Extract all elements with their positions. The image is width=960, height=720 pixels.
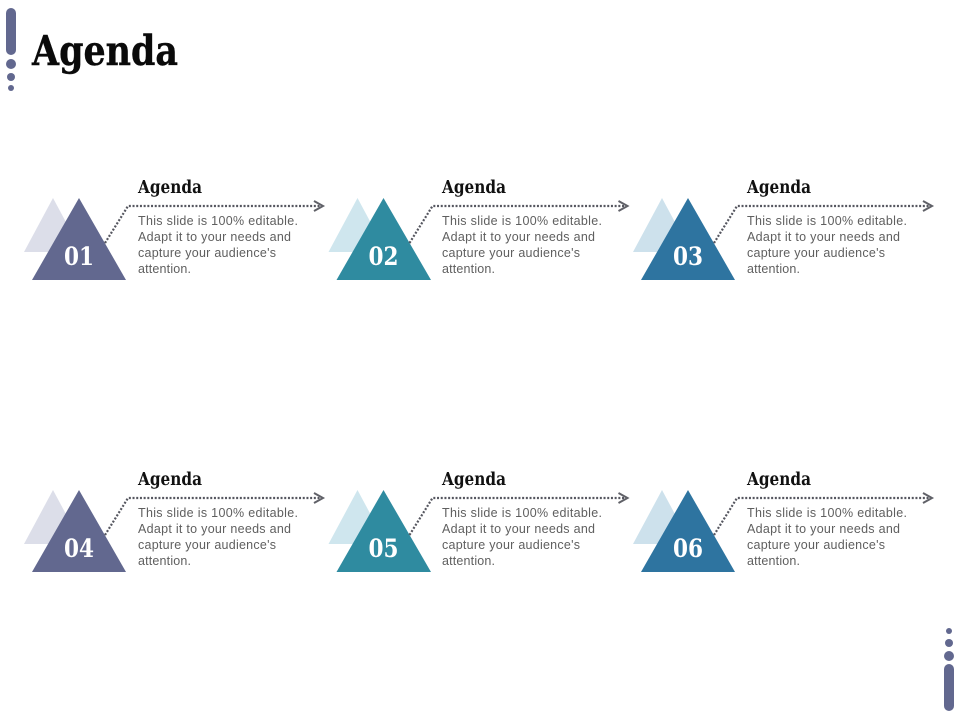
arrow 02 [410, 201, 628, 243]
title: Agenda [31, 27, 178, 75]
decoration: bottom-right pill and dots [944, 628, 954, 711]
heading 01: Agenda [137, 178, 202, 198]
icon: triangles 03 [633, 198, 735, 280]
text block 01: attention. [138, 262, 191, 276]
text block 02: This slide is 100% editable. [442, 214, 602, 228]
arrow 01 [105, 201, 323, 243]
heading 06: Agenda [746, 470, 811, 490]
text block 05: capture your audience's [442, 538, 580, 552]
text block 05: Adapt it to your needs and [442, 522, 595, 536]
number 05: 05 [368, 534, 398, 563]
text block 03: This slide is 100% editable. [747, 214, 907, 228]
text block 06: capture your audience's [747, 538, 885, 552]
text block 02: attention. [442, 262, 495, 276]
text block 04: This slide is 100% editable. [138, 506, 298, 520]
text block 03: Adapt it to your needs and [747, 230, 900, 244]
heading 03: Agenda [746, 178, 811, 198]
arrow 05 [410, 493, 628, 535]
number 06: 06 [673, 534, 703, 563]
arrow 06 [714, 493, 932, 535]
text block 04: attention. [138, 554, 191, 568]
icon: triangles 02 [328, 198, 431, 280]
text block 06: attention. [747, 554, 800, 568]
text block 01: Adapt it to your needs and [138, 230, 291, 244]
text block 06: This slide is 100% editable. [747, 506, 907, 520]
text block 05: attention. [442, 554, 495, 568]
icon: triangles 04 [24, 490, 126, 572]
icon: triangles 06 [633, 490, 735, 572]
agenda item 06 [633, 470, 932, 572]
text block 05: This slide is 100% editable. [442, 506, 602, 520]
agenda item 02 [328, 178, 628, 280]
agenda item 04 [24, 470, 323, 572]
decoration: top-left pill and dots [6, 8, 16, 91]
arrow 04 [105, 493, 323, 535]
arrow 03 [714, 201, 932, 243]
text block 04: Adapt it to your needs and [138, 522, 291, 536]
icon: triangles 01 [24, 198, 126, 280]
icon: triangles 05 [328, 490, 431, 572]
text block 04: capture your audience's [138, 538, 276, 552]
text block 03: attention. [747, 262, 800, 276]
heading 05: Agenda [441, 470, 506, 490]
number 01: 01 [64, 242, 94, 271]
agenda item 01 [24, 178, 323, 280]
number 04: 04 [64, 534, 94, 563]
text block 02: Adapt it to your needs and [442, 230, 595, 244]
number 02: 02 [368, 242, 398, 271]
text block 01: This slide is 100% editable. [138, 214, 298, 228]
text block 02: capture your audience's [442, 246, 580, 260]
heading 02: Agenda [441, 178, 506, 198]
text block 01: capture your audience's [138, 246, 276, 260]
number 03: 03 [673, 242, 703, 271]
heading 04: Agenda [137, 470, 202, 490]
text block 03: capture your audience's [747, 246, 885, 260]
agenda item 03 [633, 178, 932, 280]
agenda item 05 [328, 470, 628, 572]
text block 06: Adapt it to your needs and [747, 522, 900, 536]
